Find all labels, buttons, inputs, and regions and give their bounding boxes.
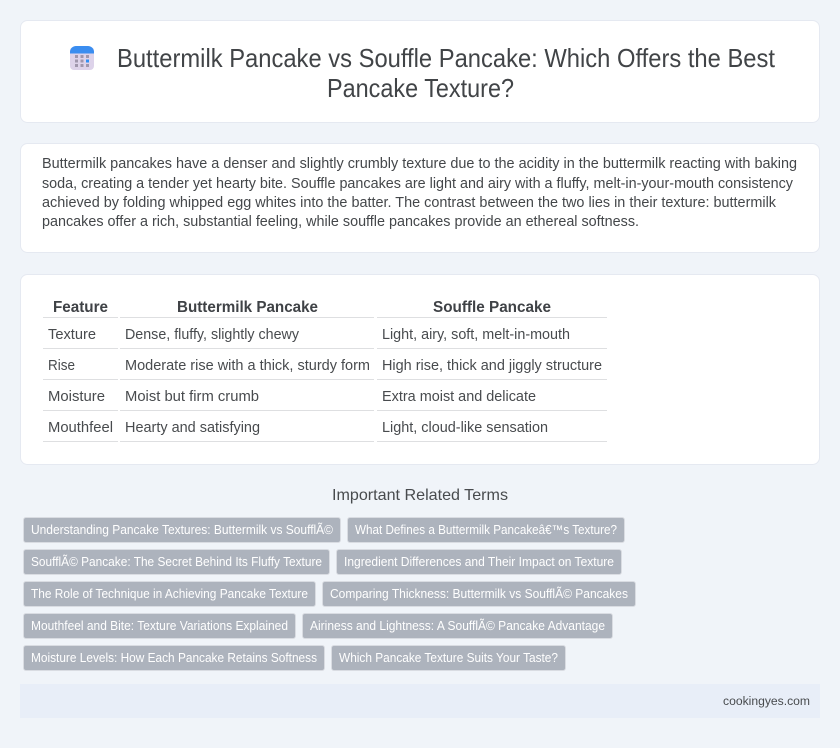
row: rise xyxy=(48,358,602,374)
table header: Feature xyxy=(53,299,108,316)
row: texture: Texture xyxy=(48,327,96,343)
row: moisture: Moisture xyxy=(48,389,105,405)
row: mouthfeel: Light, cloud-like sensation xyxy=(382,420,548,436)
table header: Buttermilk Pancake xyxy=(177,299,318,316)
row: rise: Moderate rise with a thick, sturdy form xyxy=(125,358,370,374)
title text xyxy=(117,45,775,103)
row: moisture: Extra moist and delicate xyxy=(382,389,536,405)
row: rise: Rise xyxy=(48,358,75,374)
row: texture xyxy=(48,327,570,343)
tag xyxy=(348,518,624,542)
tag xyxy=(24,646,324,670)
tag: Moisture Levels: How Each Pancake Retains Softness xyxy=(31,651,317,665)
table header: Souffle Pancake xyxy=(433,299,551,316)
heading: related terms: Important Related Terms xyxy=(332,487,508,504)
footer: cookingyes.com xyxy=(723,694,810,708)
tag: Comparing Thickness: Buttermilk vs SoufflÃ© Pancakes xyxy=(330,587,628,601)
icon: calendar xyxy=(70,46,94,70)
row: mouthfeel: Hearty and satisfying xyxy=(125,420,260,436)
title text: Buttermilk Pancake vs Souffle Pancake: Which Offers the Best xyxy=(117,45,775,73)
row: rise: High rise, thick and jiggly structure xyxy=(382,358,602,374)
table header xyxy=(53,299,551,316)
summary paragraph: Buttermilk pancakes have a denser and slightly crumbly texture due to the acidity in the buttermilk reacting with baking xyxy=(42,156,797,172)
row: moisture: Moist but firm crumb xyxy=(125,389,259,405)
tag xyxy=(24,614,296,638)
row: mouthfeel: Mouthfeel xyxy=(48,420,113,436)
summary paragraph: soda, creating a tender yet hearty bite. Souffle pancakes are light and airy with a fluffy, melt-in-your-mouth consistency xyxy=(42,176,794,192)
tag xyxy=(336,550,622,574)
row: texture: Dense, fluffy, slightly chewy xyxy=(125,327,300,343)
tag: Mouthfeel and Bite: Texture Variations Explained xyxy=(31,619,288,633)
footer xyxy=(20,684,820,718)
row: moisture xyxy=(48,389,536,405)
tag xyxy=(24,550,330,574)
row: texture: Light, airy, soft, melt-in-mouth xyxy=(382,327,570,343)
tag xyxy=(24,518,340,542)
tag xyxy=(24,582,316,606)
panel: summary xyxy=(20,144,820,252)
tag: Understanding Pancake Textures: Buttermilk vs SoufflÃ© xyxy=(31,523,334,537)
title text: Pancake Texture? xyxy=(327,75,514,103)
summary paragraph: achieved by folding whipped egg whites into the batter. The contrast between the two lies in their texture: buttermilk xyxy=(42,195,777,211)
panel: title xyxy=(20,20,820,122)
summary paragraph xyxy=(42,156,797,230)
tag: Ingredient Differences and Their Impact on Texture xyxy=(344,555,614,569)
tags: related terms xyxy=(24,518,636,670)
panel: comparison table xyxy=(20,274,820,464)
summary paragraph: pancakes offer a rich, substantial feeling, while souffle pancakes provide an ethereal softness. xyxy=(42,214,639,230)
tag: SoufflÃ© Pancake: The Secret Behind Its Fluffy Texture xyxy=(31,555,322,569)
row: mouthfeel xyxy=(48,420,548,436)
tag: What Defines a Buttermilk Pancakeâ€™s Texture? xyxy=(355,523,617,537)
tag xyxy=(302,614,612,638)
tag: Airiness and Lightness: A SoufflÃ© Pancake Advantage xyxy=(310,619,605,633)
tag: The Role of Technique in Achieving Pancake Texture xyxy=(31,587,308,601)
tag xyxy=(332,646,566,670)
tag xyxy=(322,582,636,606)
tag: Which Pancake Texture Suits Your Taste? xyxy=(339,651,558,665)
